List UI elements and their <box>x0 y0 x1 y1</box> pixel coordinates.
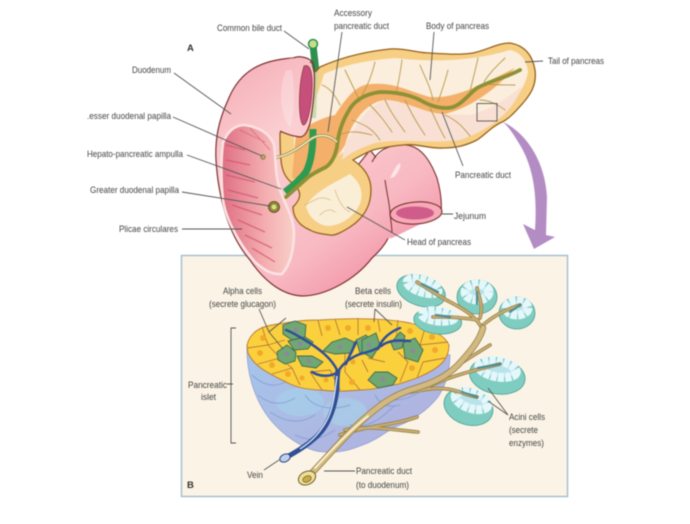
label: Pancreatic islet: islet <box>201 392 216 403</box>
label: Pancreatic duct to duodenum: Pancreatic duct <box>356 466 412 477</box>
duodenum upper opening <box>258 56 314 137</box>
label: Body of pancreas: Body of pancreas <box>426 21 489 32</box>
label: Plicae circulares: Plicae circulares <box>119 224 178 235</box>
label: Pancreatic duct to duodenum <box>356 466 412 491</box>
label: Head of pancreas: Head of pancreas <box>407 237 471 248</box>
label: Hepato-pancreatic ampulla: Hepato-pancreatic ampulla <box>87 149 184 160</box>
label: Pancreatic islet: Pancreatic <box>188 380 227 391</box>
green alpha cells <box>277 321 423 388</box>
label: Acini cells <box>509 412 545 449</box>
label: Acini cells: (secrete <box>509 425 538 436</box>
label: Jejunum: Jejunum <box>454 211 486 222</box>
label: Lesser duodenal papilla: .esser duodenal papilla <box>87 111 172 122</box>
label: Acini cells: Acini cells <box>509 412 545 423</box>
label: Duodenum: Duodenum <box>132 65 171 76</box>
label: Beta cells: (secrete insulin) <box>345 299 402 310</box>
icon: bile duct upper <box>308 40 318 72</box>
jejunum <box>366 145 443 240</box>
label: A: A <box>187 43 194 54</box>
box on tail of pancreas <box>477 104 497 121</box>
label: Accessory pancreatic duct: Accessory <box>334 8 372 19</box>
label: Acini cells: enzymes) <box>509 438 544 449</box>
greater duodenal papilla <box>268 202 280 212</box>
bile duct lower <box>285 129 313 192</box>
label: Vein: Vein <box>247 470 263 481</box>
label: Beta cells: Beta cells <box>355 286 391 297</box>
panel: B background <box>182 256 568 496</box>
label: Alpha cells <box>209 286 276 310</box>
plicae circulares <box>222 125 294 274</box>
pancreatic duct branches <box>296 282 520 488</box>
label: B: B <box>187 480 194 491</box>
lesser duodenal papilla <box>261 155 265 159</box>
pancreas <box>280 43 535 235</box>
leader lines <box>173 31 543 471</box>
accessory pancreatic duct <box>274 135 337 158</box>
label: Accessory pancreatic duct: pancreatic duct <box>334 21 389 32</box>
acini lobes <box>393 269 535 432</box>
label: Tail of pancreas: Tail of pancreas <box>548 56 604 67</box>
duodenum body <box>216 58 392 296</box>
label: Accessory pancreatic duct <box>334 8 389 32</box>
bile duct behind pancreas <box>313 72 315 118</box>
label: Beta cells <box>345 286 402 310</box>
label: Common bile duct: Common bile duct <box>217 23 282 34</box>
label: Alpha cells: Alpha cells <box>223 286 262 297</box>
yellow beta cells <box>247 319 449 391</box>
label: Alpha cells: (secrete glucagon) <box>209 299 276 310</box>
arrow: purple to panel B <box>503 122 555 249</box>
pancreatic duct <box>286 70 520 197</box>
label: Pancreatic islet <box>188 380 227 403</box>
vein <box>278 328 410 464</box>
label: Pancreatic duct: Pancreatic duct <box>455 170 511 181</box>
label: Greater duodenal papilla: Greater duodenal papilla <box>90 185 180 196</box>
islet top <box>247 318 449 391</box>
label: Pancreatic duct to duodenum: (to duodenum) <box>356 480 409 491</box>
islet base <box>247 325 450 452</box>
